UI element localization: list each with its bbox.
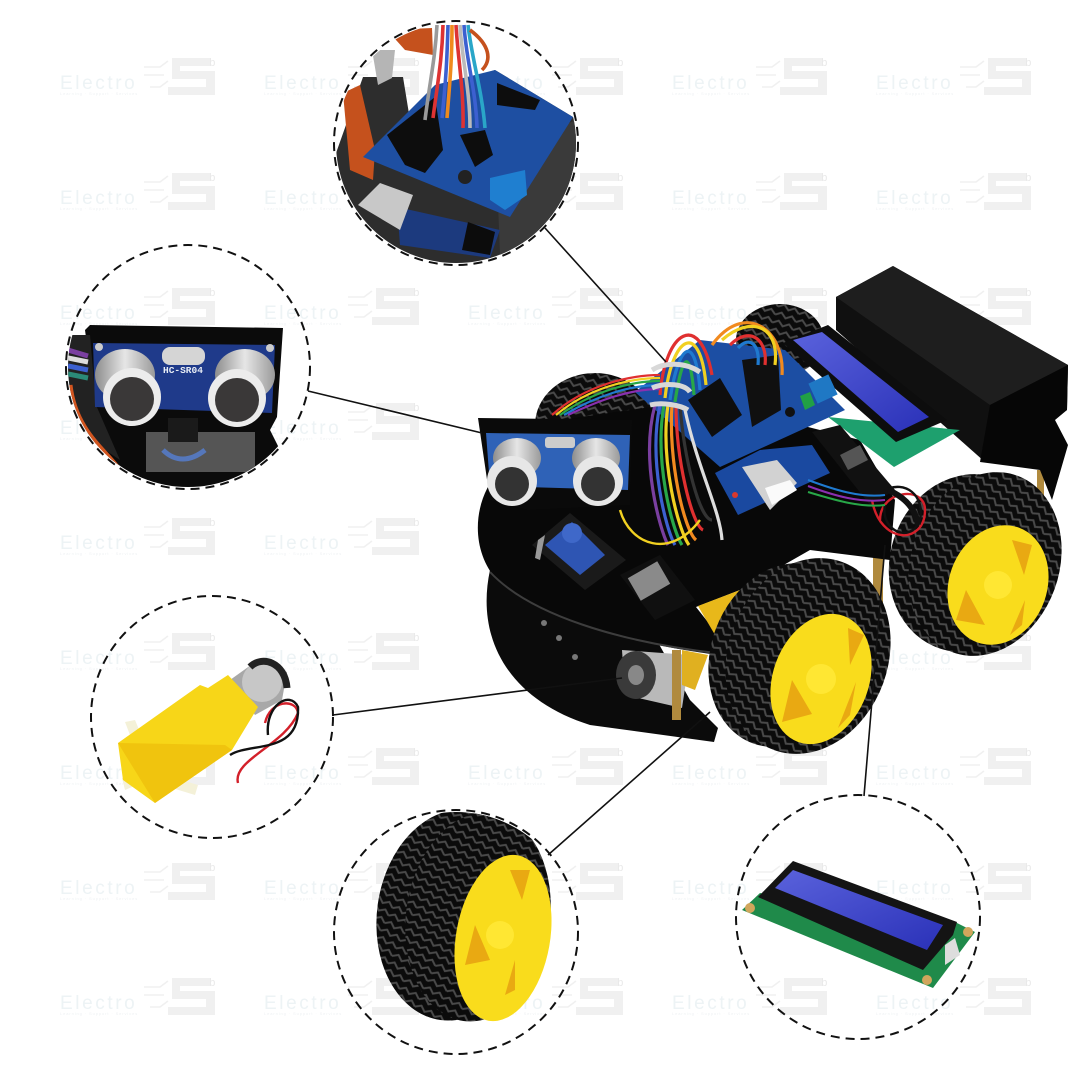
watermark grid: Learning · Support · Services [264,1011,342,1016]
watermark grid: Lab [401,57,419,69]
watermark grid: Learning · Support · Services [672,321,750,326]
axle stubs [122,720,198,795]
watermark grid: Lab [197,977,215,989]
watermark grid: Learning · Support · Services [672,91,750,96]
watermark grid: Electro [264,188,341,209]
sensor cans [95,349,155,393]
watermark grid: Learning · Support · Services [60,666,138,671]
watermark grid: Lab [197,517,215,529]
watermark grid: Lab [605,172,623,184]
watermark grid: Learning · Support · Services [876,896,954,901]
watermark grid: Lab [197,57,215,69]
watermark grid: Learning · Support · Services [264,91,342,96]
watermark grid: Learning · Support · Services [60,436,138,441]
watermark grid: Electro [672,878,749,899]
watermark grid: Learning · Support · Services [672,206,750,211]
watermark grid: Electro [672,993,749,1014]
watermark grid: Learning · Support · Services [60,321,138,326]
watermark grid: Lab [401,172,419,184]
watermark grid: Learning · Support · Services [468,896,546,901]
sensor shield board [635,340,845,467]
dashed outline [334,21,578,265]
watermark grid: Learning · Support · Services [672,781,750,786]
watermark grid: Lab [1013,57,1031,69]
motor between plates [616,650,708,708]
watermark grid: Electro [468,303,545,324]
motor wires [230,700,298,783]
watermark grid: Lab [809,747,827,759]
watermark grid: Lab [197,402,215,414]
watermark grid: Learning · Support · Services [876,321,954,326]
watermark grid: Electro [60,418,137,439]
watermark grid: Electro [264,648,341,669]
watermark grid: Electro [876,648,953,669]
watermark grid: Electro [264,73,341,94]
watermark grid: Learning · Support · Services [672,896,750,901]
watermark grid: Electro [876,73,953,94]
watermark grid: Lab [809,977,827,989]
watermark grid: Learning · Support · Services [264,666,342,671]
inset: LCD module [736,795,980,1039]
watermark grid: Electro [264,418,341,439]
watermark grid: Electro [60,763,137,784]
motor can [230,660,287,715]
watermark grid: Learning · Support · Services [876,781,954,786]
watermark grid: Electro [468,188,545,209]
dashed outline [91,596,333,838]
watermark grid: Electro [264,303,341,324]
lower plate screw holes [541,620,578,660]
watermark grid: Lab [809,287,827,299]
watermark grid: Electro [264,993,341,1014]
watermark grid: Lab [401,862,419,874]
watermark grid: Electro [264,533,341,554]
watermark grid: Learning · Support · Services [876,206,954,211]
watermark grid: Electro [876,993,953,1014]
robot car [478,266,1080,777]
watermark grid: Electro [60,188,137,209]
LCD module on car [783,325,960,467]
watermark grid: Lab [197,747,215,759]
inset: wheel [334,799,578,1054]
white cable ties [650,364,700,410]
LCD header shine [945,938,960,965]
rear right wheel [866,450,1080,678]
brass standoffs [672,470,1044,720]
watermark grid: Electro [60,533,137,554]
watermark grid: Electro [876,303,953,324]
inset: shield board [330,21,600,270]
watermark grid: Lab [605,862,623,874]
watermark grid: Electro [264,763,341,784]
rainbow ribbon cable [552,323,885,545]
watermark grid: Learning · Support · Services [468,91,546,96]
watermark grid: Learning · Support · Services [672,1011,750,1016]
watermark grid: Lab [1013,977,1031,989]
watermark grid: Electro [60,648,137,669]
watermark grid: Lab [1013,632,1031,644]
watermark grid: Learning · Support · Services [264,551,342,556]
upper chassis plate [478,400,895,655]
watermark grid: Lab [401,747,419,759]
watermark grid: Learning · Support · Services [60,551,138,556]
watermark grid: Electro [468,993,545,1014]
LCD PCB [742,893,975,988]
watermark grid: Lab [1013,747,1031,759]
watermark grid: Electro [468,763,545,784]
watermark grid: Electro [672,73,749,94]
watermark grid: Electro [672,763,749,784]
watermark grid: Lab [605,977,623,989]
coiled battery wires [872,487,925,535]
yellow gearbox [118,675,258,803]
lower chassis plate [487,570,718,742]
watermark grid: Electro [60,73,137,94]
watermark grid: Learning · Support · Services [60,781,138,786]
ultrasonic sensor on car [478,418,632,510]
watermark grid: Lab [605,57,623,69]
watermark grid: Electro [468,73,545,94]
watermark grid: Lab [809,57,827,69]
wheel photo [376,812,552,1022]
Arduino lower board [715,445,830,515]
yellow gearbox under plate [698,590,752,640]
shield PCB [363,70,573,217]
watermark grid: Electro [876,878,953,899]
watermark grid: Lab [1013,287,1031,299]
plate front edge highlight [490,572,716,653]
watermark grid: Lab [197,172,215,184]
watermark grid: Lab [401,287,419,299]
inset: ultrasonic sensor [60,245,310,500]
watermark grid: Learning · Support · Services [60,206,138,211]
LCD bezel [758,861,957,970]
watermark grid [60,57,1031,1016]
inset photo [336,24,576,263]
watermark grid: Lab [809,862,827,874]
inset: DC gear motor [91,596,333,838]
rear top tire behind board [736,304,824,376]
LCD blue screen [775,870,943,950]
watermark grid: Lab [605,287,623,299]
watermark grid: Learning · Support · Services [264,781,342,786]
watermark grid: Electro [264,878,341,899]
dashed outline [66,245,310,489]
battery box [836,266,1068,500]
watermark grid: Electro [60,878,137,899]
watermark grid: Learning · Support · Services [60,896,138,901]
watermark grid: Learning · Support · Services [264,436,342,441]
watermark grid: Lab [401,517,419,529]
servo [532,513,626,590]
watermark grid: Lab [809,172,827,184]
watermark grid: Learning · Support · Services [876,436,954,441]
watermark grid: Lab [605,747,623,759]
watermark grid: Electro [672,303,749,324]
watermark grid: Lab [401,977,419,989]
watermark grid: Learning · Support · Services [264,206,342,211]
watermark grid: Lab [401,402,419,414]
watermark grid: Electro [876,188,953,209]
connector lines [308,228,885,855]
rear left tire behind chassis [535,373,655,477]
watermark grid: Learning · Support · Services [876,666,954,671]
dashed outline [334,810,578,1054]
watermark grid: Lab [1013,402,1031,414]
inset photo [68,325,283,487]
watermark grid: Electro [60,993,137,1014]
watermark grid: Lab [1013,862,1031,874]
lower Arduino board [397,207,500,258]
watermark grid: Electro [876,763,953,784]
dashed outline [736,795,980,1039]
watermark grid: Learning · Support · Services [468,781,546,786]
watermark grid: Lab [401,632,419,644]
watermark grid: Electro [876,418,953,439]
watermark grid: Learning · Support · Services [468,1011,546,1016]
power jack and cable clip [812,425,895,505]
watermark grid: Electro [468,878,545,899]
watermark grid: Lab [197,287,215,299]
watermark grid: Lab [197,632,215,644]
jumper wires [425,25,488,128]
watermark grid: Learning · Support · Services [468,321,546,326]
watermark grid: Learning · Support · Services [876,91,954,96]
watermark grid: Lab [1013,172,1031,184]
watermark grid: Learning · Support · Services [264,896,342,901]
IR receiver module [620,555,695,620]
front wheel [683,535,917,777]
module label: HC-SR04 [163,365,203,376]
watermark grid: Learning · Support · Services [876,1011,954,1016]
watermark grid: Learning · Support · Services [60,91,138,96]
watermark grid: Electro [60,303,137,324]
watermark grid: Lab [197,862,215,874]
watermark grid: Learning · Support · Services [468,206,546,211]
watermark grid: Learning · Support · Services [60,1011,138,1016]
watermark grid: Electro [672,188,749,209]
watermark grid: Learning · Support · Services [264,321,342,326]
